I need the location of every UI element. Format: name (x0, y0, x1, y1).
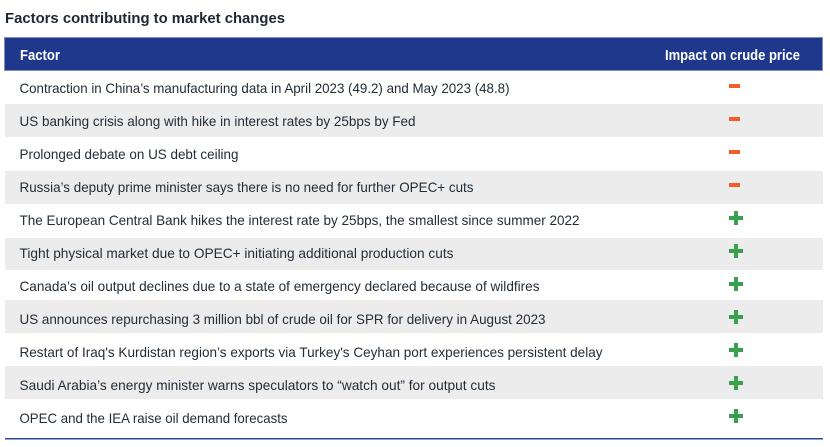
row 6 (5, 238, 823, 270)
row 1: Contraction in China’s manufacturing data in April 2023 (49.2) and May 2023 (48.8) (20, 80, 510, 96)
row 11: OPEC and the IEA raise oil demand forecasts (20, 410, 288, 426)
table header: Impact on crude price (665, 47, 800, 64)
table bottom rule (5, 438, 823, 440)
row 10 (5, 366, 823, 399)
row 10: Saudi Arabia’s energy minister warns speculators to “watch out” for output cuts (20, 377, 496, 393)
row 2 (5, 104, 823, 137)
table header (4, 38, 822, 70)
row 8 (5, 300, 823, 333)
row 11 (20, 409, 743, 426)
row 4: Russia’s deputy prime minister says there is no need for further OPEC+ cuts (20, 179, 474, 195)
title: Factors contributing to market changes (5, 10, 285, 27)
row 4 (5, 171, 823, 204)
row 6: Tight physical market due to OPEC+ initiating additional production cuts (20, 245, 454, 261)
row 7 (20, 277, 743, 294)
row 9: Restart of Iraq's Kurdistan region’s exports via Turkey's Ceyhan port experiences persistent delay (20, 344, 602, 360)
row 8: US announces repurchasing 3 million bbl of crude oil for SPR for delivery in August 2023 (20, 311, 546, 327)
row 2: US banking crisis along with hike in interest rates by 25bps by Fed (20, 113, 416, 129)
row 3 (20, 146, 740, 162)
row 5: The European Central Bank hikes the interest rate by 25bps, the smallest since summer 2022 (20, 212, 580, 228)
row 7: Canada’s oil output declines due to a state of emergency declared because of wildfires (20, 278, 540, 294)
table header: Factor (20, 47, 60, 64)
row 3: Prolonged debate on US debt ceiling (20, 146, 238, 162)
